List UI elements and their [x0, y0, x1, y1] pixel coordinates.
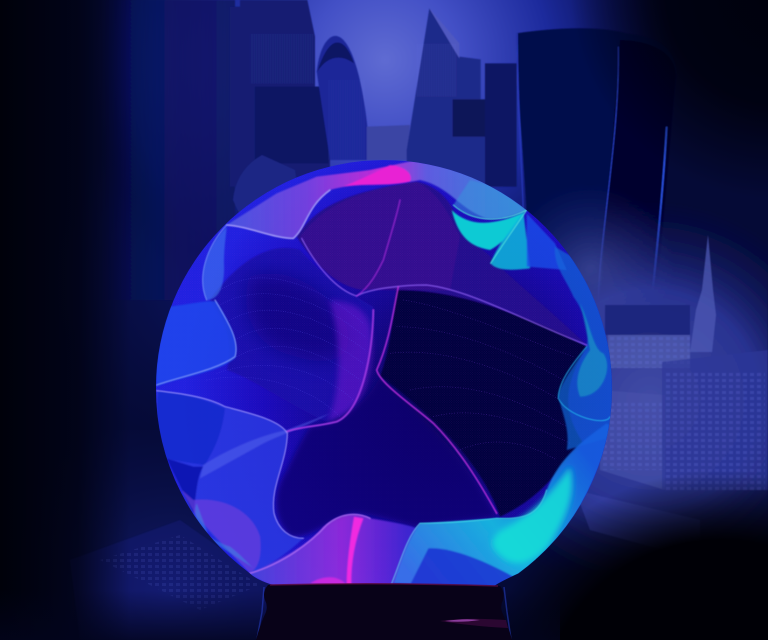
base glow edge — [257, 587, 511, 639]
vignette: bottom edge — [0, 590, 560, 640]
magenta streak — [347, 517, 363, 585]
dark heart of left lobe — [246, 273, 350, 361]
lower-left rooftops — [0, 430, 400, 640]
pale building windows — [608, 335, 690, 368]
top ribbon — [227, 160, 527, 238]
dots texture — [158, 160, 606, 566]
lamp base — [256, 584, 512, 640]
teal patch upper right — [452, 210, 525, 250]
spire — [690, 235, 716, 352]
inner dark lobe right — [380, 290, 587, 517]
building: walkie talkie tower — [517, 28, 677, 300]
pale band upper right — [453, 180, 527, 219]
ribbons — [156, 160, 617, 587]
building: distant low skyline — [367, 125, 410, 160]
building: scalpel tower — [407, 8, 503, 187]
magenta foot — [310, 577, 347, 585]
teal glow — [492, 467, 572, 563]
far-left pocket — [157, 391, 225, 465]
lobe purple tint — [300, 182, 460, 290]
globe soft fills — [210, 182, 587, 517]
left dome — [233, 155, 300, 215]
haze on walkie talkie base — [500, 180, 680, 355]
building: left tower block — [230, 0, 330, 187]
lit buildings: right-hand district — [440, 180, 768, 570]
base reflection — [440, 619, 508, 628]
lower-left ribbon — [156, 390, 303, 573]
plasma globe — [156, 160, 612, 586]
low street band — [575, 490, 700, 560]
mesh lines: right lobe — [390, 300, 573, 460]
violet glow near centre — [327, 300, 372, 425]
bottom magenta ribbon — [247, 515, 417, 587]
globe base — [150, 150, 620, 597]
base body — [256, 584, 512, 640]
blue fold at edge — [527, 213, 567, 270]
top magenta core — [343, 165, 411, 187]
pale corner fold — [194, 504, 251, 566]
inner glow centre-left — [210, 248, 373, 423]
inner teal fold — [491, 212, 530, 270]
building: faint left towers — [100, 0, 235, 300]
pale building roof — [605, 305, 690, 335]
vignette: left edge — [0, 0, 130, 640]
inner purple lobe top — [297, 182, 587, 345]
diagonal pale band — [200, 413, 330, 478]
left blue band — [156, 301, 236, 387]
dark wedge — [167, 458, 203, 513]
city skyline — [100, 0, 677, 300]
purple corner — [182, 490, 261, 573]
left upper loop — [203, 227, 227, 300]
mesh lines: left lobe — [207, 278, 365, 417]
lower-right mass — [392, 423, 612, 587]
right edge ribbon — [555, 247, 617, 450]
lower-right dark blue pocket — [410, 548, 513, 587]
right edge teal — [577, 303, 607, 397]
building: gherkin — [317, 36, 367, 160]
base top rim — [270, 584, 498, 586]
tall block — [662, 350, 768, 490]
bright ribbon edges — [157, 190, 610, 583]
centre lower dark — [276, 377, 497, 537]
